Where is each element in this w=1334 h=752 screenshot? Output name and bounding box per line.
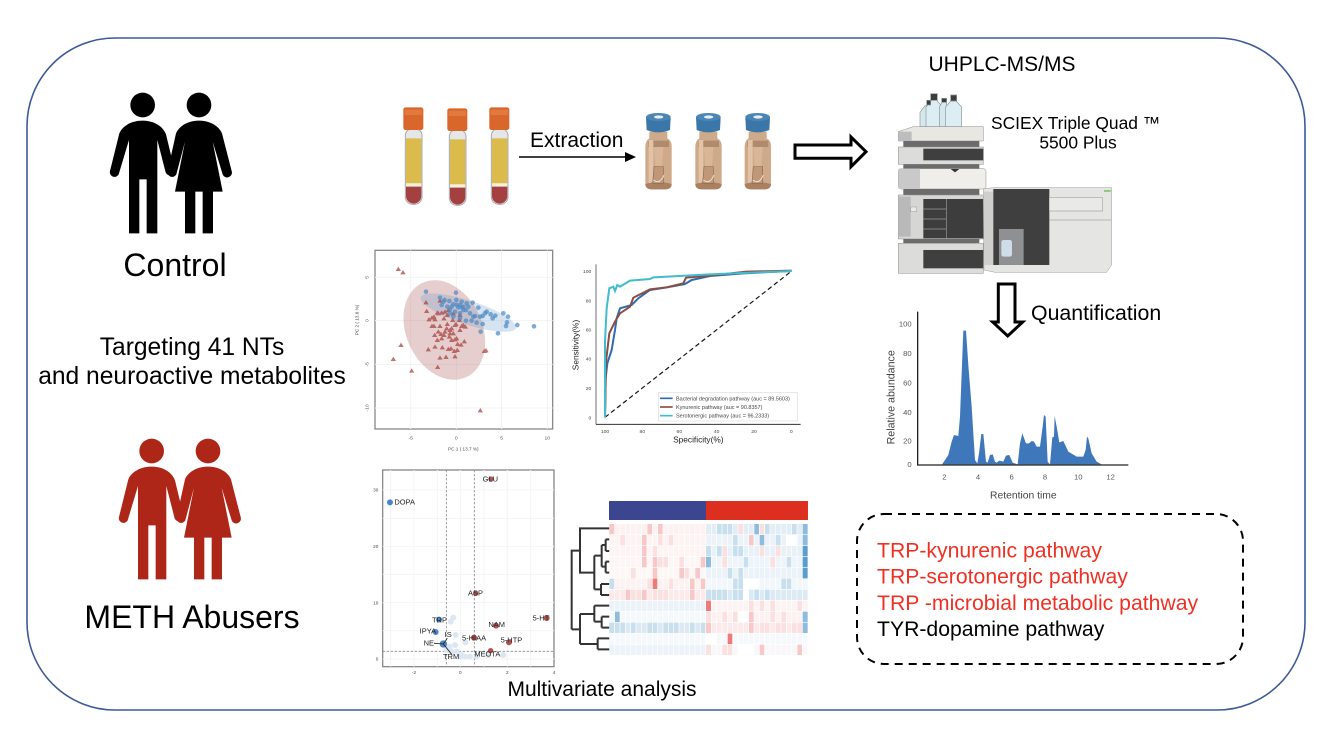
icon: LC-MS instrument <box>898 94 1112 273</box>
PCA y ticks: 5 <box>365 276 371 279</box>
stack tier 3 <box>898 169 986 189</box>
ROC legend <box>658 393 797 421</box>
ROC x ticks: 80 <box>640 429 645 435</box>
chromatogram y label: Relative abundance <box>885 350 897 444</box>
chart: volcano plot <box>373 470 556 675</box>
PCA x label: PC 1 ( 13.7 %) <box>448 447 479 452</box>
volcano metabolite labels <box>394 474 550 661</box>
ROC curve: bacterial <box>605 271 792 417</box>
PCA ellipse: control group <box>417 286 520 340</box>
chromatogram tick labels: 40 <box>903 408 912 417</box>
chromatogram x ticks: 10 <box>1074 472 1083 481</box>
panel: PCA score plot <box>354 250 553 452</box>
label: instrument name: 5500 Plus <box>1039 132 1117 152</box>
chromatogram tick labels: 60 <box>903 378 912 387</box>
PCA x ticks: 10 <box>545 436 550 442</box>
ROC y ticks: 100 <box>583 269 592 275</box>
ROC x ticks: 0 <box>790 429 793 435</box>
PCA y label: PC 2 ( 13.6 %) <box>354 304 359 335</box>
ROC y ticks: 80 <box>586 298 592 304</box>
heatmap group bar: METH <box>706 501 808 520</box>
PCA y ticks <box>365 276 371 412</box>
ROC y label: Sensitivity(%) <box>570 320 580 370</box>
icon: METH abuser couple <box>119 439 241 579</box>
volcano y ticks: 10 <box>373 600 379 605</box>
volcano up-regulated points <box>471 476 550 653</box>
ROC legend: Serotonergic pathway (auc = 96.2333) <box>676 414 769 420</box>
heatmap cells <box>609 524 808 655</box>
ROC y ticks: 60 <box>586 328 592 334</box>
chromatogram x ticks: 8 <box>1043 472 1047 481</box>
volcano metabolite labels: IS <box>445 630 452 639</box>
pathway list: TYR-dopamine pathway <box>877 618 1105 641</box>
chromatogram x ticks: 2 <box>942 472 946 481</box>
volcano metabolite labels: 5-HT <box>533 613 550 622</box>
volcano metabolite labels: TRM <box>443 652 459 661</box>
chart: chromatogram <box>885 312 1128 502</box>
chromatogram tick labels: 0 <box>907 460 912 469</box>
PCA circles <box>424 289 536 336</box>
chromatogram tick labels: 100 <box>899 320 912 329</box>
ROC y ticks: 20 <box>586 386 592 392</box>
pathway list <box>877 540 1198 641</box>
ROC x ticks <box>601 429 793 435</box>
text: targeting 41 NTs <box>38 334 346 390</box>
label: Extraction: Extraction <box>530 129 623 152</box>
chromatogram tick labels <box>899 320 912 469</box>
pathway list: TRP-serotonergic pathway <box>877 566 1128 588</box>
stack tier 2 <box>898 147 983 164</box>
ROC curve: kynurenic <box>605 271 792 417</box>
ROC x ticks: 20 <box>751 429 757 435</box>
arrow: hollow down <box>993 284 1023 336</box>
icon: blood tubes <box>403 107 509 205</box>
PCA x ticks: -5 <box>408 436 413 442</box>
volcano x ticks: 4 <box>553 670 556 675</box>
volcano metabolite labels: 5-HIAA <box>462 634 486 643</box>
chromatogram x label: Retention time <box>990 491 1057 502</box>
chart: heatmap <box>572 501 808 655</box>
stack tier 4 <box>898 195 983 239</box>
ROC y ticks <box>583 269 592 421</box>
label: Multivariate analysis: Multivariate analysis <box>507 678 697 701</box>
PCA x ticks: 0 <box>455 436 458 442</box>
volcano x ticks: 0 <box>459 670 462 675</box>
label: Quantification: Quantification <box>1031 301 1161 325</box>
volcano metabolite labels: NAM <box>488 620 505 629</box>
pathway list: TRP-kynurenic pathway <box>877 540 1102 562</box>
label: instrument name: SCIEX Triple Quad ™ <box>991 113 1160 133</box>
heatmap dendrogram <box>572 528 609 649</box>
volcano metabolite labels: TRP <box>432 615 447 624</box>
PCA y ticks: 0 <box>365 319 371 322</box>
PCA y ticks: -5 <box>365 362 371 367</box>
volcano y ticks: 0 <box>376 657 379 662</box>
label: instrument name <box>991 113 1160 152</box>
arrow: extraction <box>519 152 636 162</box>
chromatogram x ticks: 12 <box>1106 472 1115 481</box>
PCA x ticks: 5 <box>500 436 503 442</box>
panel: pathways callout <box>857 514 1243 664</box>
stack tier 5 <box>898 243 983 273</box>
ROC x ticks: 40 <box>714 429 720 435</box>
volcano x ticks <box>412 670 556 675</box>
PCA triangles <box>391 267 489 412</box>
PCA y ticks: -10 <box>365 404 371 412</box>
chromatogram peaks <box>942 331 1102 465</box>
volcano y ticks: 30 <box>373 488 379 493</box>
chromatogram tick labels: 80 <box>903 349 912 358</box>
pathway list: TRP -microbial metabolic pathway <box>877 592 1198 615</box>
heading: Control: Control <box>123 247 227 283</box>
label: UHPLC-MS/MS: UHPLC-MS/MS <box>928 53 1076 76</box>
volcano y ticks: 20 <box>373 544 379 549</box>
volcano x ticks: 2 <box>506 670 509 675</box>
ROC legend: Kynurenic pathway (auc = 90.8357) <box>676 405 763 411</box>
chromatogram x ticks: 6 <box>1010 472 1014 481</box>
icon: vials <box>645 113 771 189</box>
ROC curve: serotonergic <box>605 271 792 417</box>
ROC legend: Bacterial degradation pathway (auc = 89.5603) <box>676 396 790 402</box>
heading: METH Abusers: METH Abusers <box>84 599 300 635</box>
PCA x ticks <box>408 436 550 442</box>
volcano metabolite labels: NE <box>424 639 434 648</box>
volcano non-significant points <box>444 615 506 660</box>
arrow: hollow right <box>795 137 866 167</box>
volcano metabolite labels: IPYA <box>420 627 436 636</box>
ROC x ticks: 60 <box>677 429 682 435</box>
volcano x ticks: -2 <box>412 670 416 675</box>
chromatogram tick labels: 20 <box>903 437 912 446</box>
icon: control couple <box>110 93 232 233</box>
chart: ROC curves <box>570 264 801 445</box>
volcano metabolite labels: ASP <box>468 589 483 598</box>
mass spectrometer <box>983 188 1112 272</box>
ROC y ticks: 40 <box>586 357 592 363</box>
ROC y ticks: 0 <box>589 415 592 421</box>
volcano metabolite labels: 5-HTP <box>501 635 522 644</box>
stack tier 1 <box>898 127 983 141</box>
text: targeting 41 NTs: Targeting 41 NTs <box>100 334 284 361</box>
volcano down-regulated points <box>387 499 447 648</box>
PCA ellipse: METH group <box>388 267 501 393</box>
volcano metabolite labels: MEOTA <box>474 649 500 658</box>
solvent bottles <box>920 94 962 127</box>
ROC x label: Specificity(%) <box>673 435 724 445</box>
heatmap group bar: control <box>609 501 706 520</box>
text: targeting 41 NTs: and neuroactive metabolites <box>38 363 346 390</box>
volcano metabolite labels: DOPA <box>394 498 415 507</box>
chromatogram x ticks: 4 <box>976 472 981 481</box>
chromatogram x ticks <box>942 472 1115 481</box>
ROC x ticks: 100 <box>601 429 609 435</box>
volcano y ticks <box>373 488 379 662</box>
volcano metabolite labels: GLU <box>483 474 498 483</box>
